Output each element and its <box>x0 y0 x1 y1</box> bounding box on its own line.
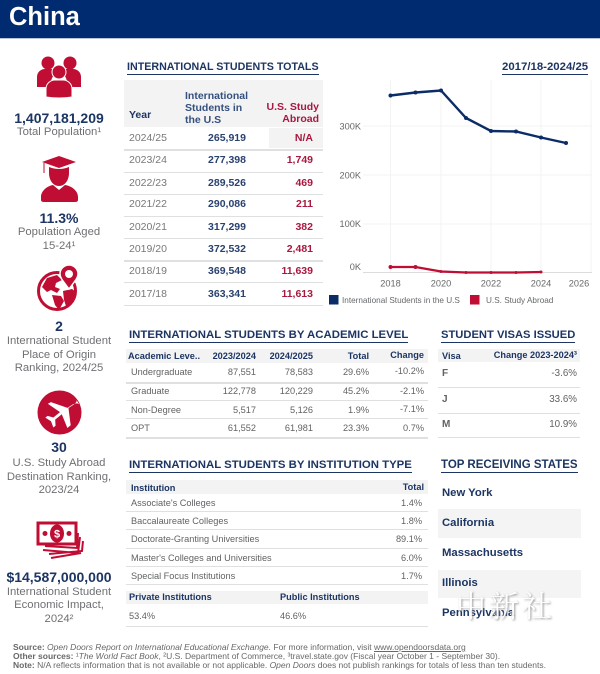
watermark: 中新社 <box>456 591 555 624</box>
sector header <box>126 591 428 604</box>
row: F <box>438 365 580 388</box>
row 2019/20: 372,532 <box>208 243 246 255</box>
row: J: J <box>442 394 448 405</box>
row: graduate: -2.1% <box>400 386 424 396</box>
row: undergraduate: 87,551 <box>228 367 256 377</box>
row: OPT: 0.7% <box>403 423 424 433</box>
state: Illinois <box>438 570 581 598</box>
x axis labels: 2022 <box>481 278 501 288</box>
panel: top states list <box>438 487 581 619</box>
row: master's: 6.0% <box>401 553 422 563</box>
sector values <box>126 606 428 627</box>
row: special focus: 1.7% <box>401 571 422 581</box>
icon: airplane badge <box>38 390 82 434</box>
header row <box>126 480 428 494</box>
header row: Change 2023-2024³ <box>494 350 577 360</box>
population value: 1,407,181,209 <box>14 110 104 126</box>
row 2017/18 <box>124 286 323 306</box>
y axis labels: 100K <box>340 219 362 229</box>
series: study abroad <box>388 265 542 274</box>
heading: academic level: INTERNATIONAL STUDENTS BY ACADEMIC LEVEL <box>129 329 408 341</box>
row 2024/25: 265,919 <box>208 132 246 144</box>
row: doctorate: Doctorate-Granting Universities <box>131 534 259 544</box>
row: graduate: 120,229 <box>280 386 313 396</box>
row: non-degree: 1.9% <box>348 405 369 415</box>
row 2017/18: 363,341 <box>208 288 246 300</box>
economic impact label <box>7 586 112 624</box>
state: New York: New York <box>442 487 492 499</box>
icon: banknotes <box>36 522 84 559</box>
x axis labels: 2026 <box>569 278 589 288</box>
header row: Institution <box>131 483 175 493</box>
youth population value: 11.3% <box>40 210 78 226</box>
heading: student visas: STUDENT VISAS ISSUED <box>441 329 575 341</box>
N/A cell background <box>269 128 323 148</box>
row: associate's <box>126 496 428 512</box>
column: year: Year <box>129 109 151 121</box>
row 2021/22 <box>124 197 323 217</box>
heading: chart period: 2017/18-2024/25 <box>502 61 588 73</box>
row 2024/25 <box>124 130 323 151</box>
row: undergraduate: Undergraduate <box>131 367 192 377</box>
row 2018/19: 369,548 <box>208 265 246 277</box>
header row: Change <box>390 350 424 360</box>
row: non-degree: 5,517 <box>233 405 256 415</box>
state: Massachusetts: Massachusetts <box>442 547 523 559</box>
column: study abroad: Abroad <box>282 113 319 125</box>
icon: graduate <box>41 156 78 202</box>
row 2022/23: 289,526 <box>208 177 246 189</box>
row 2023/24 <box>124 152 323 173</box>
row 2018/19: 2018/19 <box>129 265 167 277</box>
row: special focus: Special Focus Institutions <box>131 571 235 581</box>
row: F: -3.6% <box>551 368 577 379</box>
row: master's <box>126 551 428 567</box>
youth population label: 15-24¹ <box>43 240 75 252</box>
panel: institution table <box>126 480 428 627</box>
row: J <box>438 390 580 414</box>
x axis labels <box>380 278 589 288</box>
economic impact label: Economic Impact, <box>14 599 104 611</box>
row: OPT: OPT <box>131 423 150 433</box>
row 2022/23 <box>124 175 323 195</box>
row: undergraduate: -10.2% <box>395 366 424 376</box>
column: study abroad: U.S. Study <box>266 101 319 113</box>
origin rank label: International Student <box>7 335 111 347</box>
x axis labels: 2024 <box>531 278 551 288</box>
y axis labels <box>340 122 362 272</box>
row: OPT: 61,552 <box>228 423 256 433</box>
header row <box>438 349 580 362</box>
row: undergraduate: 29.6% <box>343 367 369 377</box>
legend <box>329 295 554 305</box>
destination rank value: 30 <box>51 439 67 455</box>
icon: group of people <box>37 56 81 98</box>
row: M: M <box>442 419 450 430</box>
sector header: Private Institutions <box>129 592 212 602</box>
heading: institution type: INTERNATIONAL STUDENTS BY INSTITUTION TYPE <box>129 459 412 471</box>
panel: academic level table <box>126 349 428 439</box>
row: non-degree: 5,126 <box>290 405 313 415</box>
y axis labels: 200K <box>340 170 362 180</box>
icon: banknotes: $ <box>54 528 60 540</box>
row 2021/22: 290,086 <box>208 198 246 210</box>
y axis labels: 0K <box>350 262 362 272</box>
row: graduate: 45.2% <box>343 386 369 396</box>
column: international students: Students in <box>185 102 242 114</box>
row: baccalaureate: 1.8% <box>401 516 422 526</box>
row: baccalaureate <box>126 514 428 530</box>
row: master's: Master's Colleges and Universities <box>131 553 272 563</box>
row: OPT <box>126 421 428 439</box>
header banner <box>0 0 600 39</box>
header row: Total <box>403 482 424 492</box>
row: undergraduate <box>126 365 428 384</box>
row: graduate <box>126 384 428 401</box>
row: special focus <box>126 569 428 585</box>
column: international students: the U.S <box>185 114 221 126</box>
footnotes: Source: Open Doors Report on International Educational Exchange. For more information, visit www.opendoorsdata.org <box>13 642 466 652</box>
row: OPT: 61,981 <box>285 423 313 433</box>
icon: globe with pin <box>37 266 78 311</box>
title: China <box>9 3 80 31</box>
destination rank label <box>7 457 111 496</box>
column: international students <box>185 90 248 126</box>
footnotes <box>13 642 546 670</box>
heading: top receiving states: TOP RECEIVING STATES <box>441 459 578 471</box>
panel: visas table <box>438 349 580 438</box>
heading: international students totals: INTERNATIONAL STUDENTS TOTALS <box>127 61 319 73</box>
state: California: California <box>442 517 494 529</box>
row: non-degree: Non-Degree <box>131 405 181 415</box>
sector values: 46.6% <box>280 611 306 621</box>
row: graduate: Graduate <box>131 386 169 396</box>
row: F: F <box>442 368 448 379</box>
row 2023/24: 2023/24 <box>129 154 167 166</box>
row 2019/20 <box>124 241 323 262</box>
row 2022/23: 469 <box>295 177 313 189</box>
economic impact label: 2024² <box>45 612 73 624</box>
row: doctorate: 89.1% <box>396 534 422 544</box>
x axis labels: 2018 <box>380 278 401 288</box>
origin rank label: Ranking, 2024/25 <box>15 362 103 374</box>
row 2019/20: 2019/20 <box>129 243 167 255</box>
line chart: students over time <box>329 80 592 305</box>
row: M <box>438 415 580 438</box>
row 2021/22: 2021/22 <box>129 198 167 210</box>
row 2022/23: 2022/23 <box>129 177 167 189</box>
destination rank label: Destination Ranking, <box>7 470 111 482</box>
row 2018/19: 11,639 <box>281 265 313 277</box>
x axis labels: 2020 <box>431 278 451 288</box>
row 2017/18: 11,613 <box>281 288 313 300</box>
population label: Total Population¹ <box>17 126 101 138</box>
row 2024/25: N/A <box>295 132 313 144</box>
state: California <box>438 509 581 538</box>
row: associate's: 1.4% <box>401 498 422 508</box>
row: undergraduate: 78,583 <box>285 367 313 377</box>
destination rank label: U.S. Study Abroad <box>13 457 105 469</box>
origin rank value: 2 <box>55 318 63 334</box>
row: J: 33.6% <box>549 394 577 405</box>
legend: International Students in the U.S <box>342 296 460 305</box>
row: doctorate <box>126 532 428 549</box>
economic impact value: $14,587,000,000 <box>6 569 112 585</box>
header row <box>126 349 428 363</box>
row 2020/21 <box>124 219 323 239</box>
row 2024/25: 2024/25 <box>129 132 167 144</box>
origin rank label <box>7 335 112 374</box>
panel: totals table <box>124 80 323 306</box>
column: international students: International <box>185 90 248 102</box>
row 2020/21: 317,299 <box>208 221 246 233</box>
header row: Academic Leve.. <box>128 351 200 361</box>
row: associate's: Associate's Colleges <box>131 498 215 508</box>
header row: Visa <box>442 351 461 361</box>
sector header: Public Institutions <box>280 592 360 602</box>
row 2020/21: 2020/21 <box>129 221 167 233</box>
youth population label <box>18 226 100 252</box>
origin rank label: Place of Origin <box>22 348 96 360</box>
row: baccalaureate: Baccalaureate Colleges <box>131 516 228 526</box>
footnotes: Other sources: ¹The World Fact Book, ²U.S. Department of Commerce, ³travel.state.gov (Fiscal year October 1 - September 30). <box>13 651 500 661</box>
header row: Total <box>348 351 369 361</box>
row 2018/19 <box>124 264 323 283</box>
row 2021/22: 211 <box>296 198 313 210</box>
header row: 2024/2025 <box>270 351 313 361</box>
row: OPT: 23.3% <box>343 423 369 433</box>
state: Pennsylvania: Pennsylvania <box>442 607 514 619</box>
sector values: 53.4% <box>129 611 155 621</box>
row: M: 10.9% <box>549 419 577 430</box>
series: international students <box>388 88 568 145</box>
legend: U.S. Study Abroad <box>486 296 554 305</box>
row 2017/18: 2017/18 <box>129 288 167 300</box>
column: study abroad <box>266 101 319 125</box>
row 2020/21: 382 <box>295 221 313 233</box>
destination rank label: 2023/24 <box>39 484 79 496</box>
footnotes: Note: N/A reflects information that is not available or not applicable. Open Doors does not publish rankings for totals of less than ten students. <box>13 660 546 670</box>
y axis labels: 300K <box>340 122 362 132</box>
row: non-degree: -7.1% <box>400 404 424 414</box>
youth population label: Population Aged <box>18 226 100 238</box>
state: Illinois: Illinois <box>442 577 478 589</box>
row: non-degree <box>126 403 428 419</box>
row 2019/20: 2,481 <box>287 243 313 255</box>
row 2023/24: 1,749 <box>287 154 313 166</box>
row: graduate: 122,778 <box>223 386 256 396</box>
table header <box>124 80 323 127</box>
row 2023/24: 277,398 <box>208 154 246 166</box>
header row: 2023/2024 <box>213 351 256 361</box>
economic impact label: International Student <box>7 586 111 598</box>
